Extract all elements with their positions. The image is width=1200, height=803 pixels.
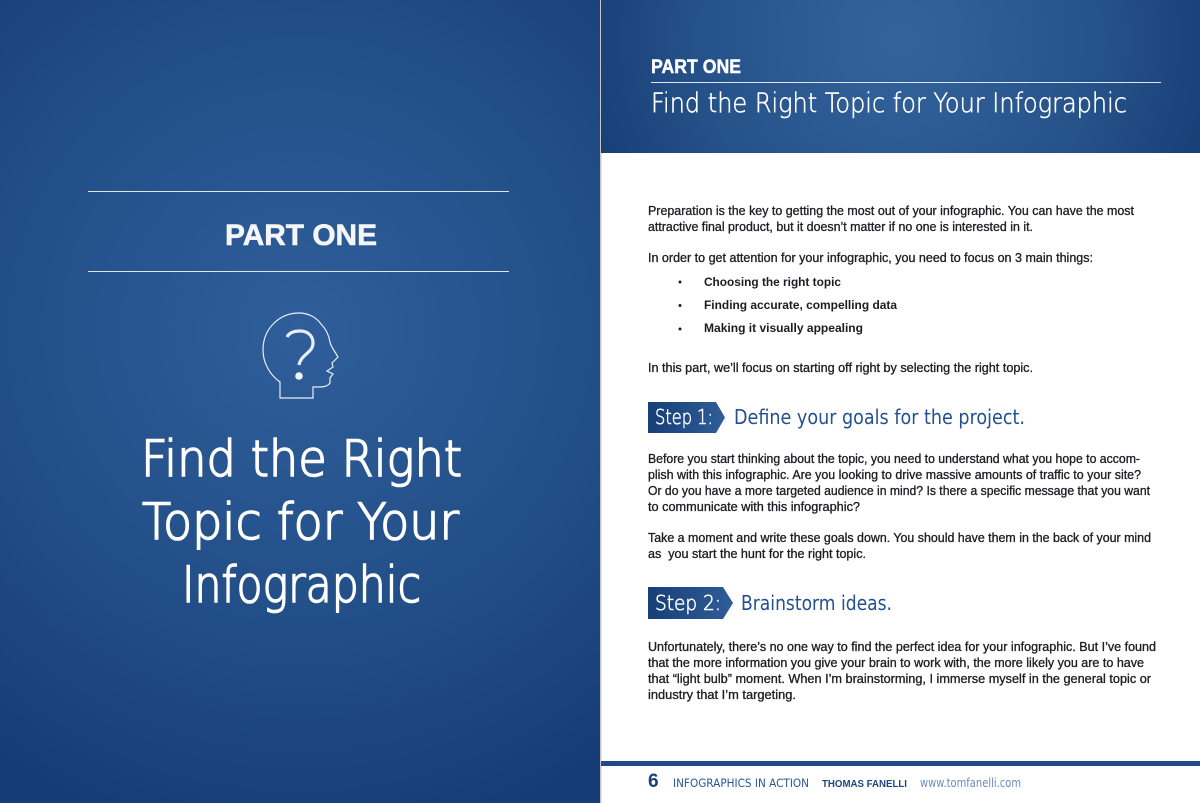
- header title: Find the Right Topic for Your Infographic: [651, 88, 1127, 119]
- icon: head with question mark: [263, 313, 338, 398]
- cover title: Topic for Your: [142, 493, 459, 551]
- website: www.tomfanelli.com: [920, 776, 1021, 790]
- cover title: Find the Right: [141, 430, 462, 488]
- book title: INFOGRAPHICS IN ACTION: [673, 776, 809, 790]
- panel: right page header: [601, 0, 1200, 153]
- text block: focus sentence: In this part, we’ll focus on starting off right by selecting the right topic.: [648, 360, 1033, 375]
- cover heading: part one: PART ONE: [225, 219, 377, 252]
- footer: [601, 761, 1200, 792]
- cover title: Infographic: [182, 556, 421, 614]
- bulleted list: Making it visually appealing: [704, 321, 863, 335]
- text block: step 2 body: that “light bulb” moment. When I’m brainstorming, I immerse myself in the general topic or: [648, 671, 1152, 686]
- text block: step 2 body: [648, 639, 1156, 702]
- text block: step 1 body: as you start the hunt for the right topic.: [648, 546, 866, 561]
- text block: introduction: attractive final product, but it doesn’t matter if no one is interested in it.: [648, 219, 1033, 234]
- page number: 6: [648, 771, 659, 792]
- text block: step 2 body: industry that I’m targeting.: [648, 687, 796, 702]
- text block: step 1 body: Before you start thinking about the topic, you need to understand what you hope to accom-: [648, 451, 1140, 466]
- step 1 heading: [648, 402, 1025, 433]
- step 1 arrow tag: [648, 402, 725, 433]
- panel: left cover page: [0, 0, 600, 803]
- text block: introduction: In order to get attention for your infographic, you need to focus on 3 main things:: [648, 250, 1093, 265]
- text block: step 2 body: that the more information you give your brain to work with, the more likely you are to have: [648, 655, 1144, 670]
- step 2 arrow tag: [648, 587, 733, 619]
- text block: step 1 body: Or do you have a more targeted audience in mind? Is there a specific message that you want: [648, 483, 1150, 498]
- header label: part one: PART ONE: [651, 57, 741, 78]
- step 2 arrow tag: Step 2:: [655, 591, 721, 615]
- step 1 arrow tag: Step 1:: [655, 405, 713, 429]
- text block: introduction: Preparation is the key to getting the most out of your infographic. You can have the most: [648, 203, 1134, 218]
- text block: step 2 body: Unfortunately, there’s no one way to find the perfect idea for your infographic. But I’ve found: [648, 639, 1156, 654]
- step 2 heading: Brainstorm ideas.: [741, 591, 892, 615]
- bulleted list: Finding accurate, compelling data: [704, 298, 897, 312]
- text block: step 1 body: plish with this infographic. Are you looking to drive massive amounts of traffic to your site?: [648, 467, 1141, 482]
- bulleted list: Choosing the right topic: [704, 275, 841, 289]
- text block: step 1 body: to communicate with this infographic?: [648, 499, 860, 514]
- author: THOMAS FANELLI: [822, 778, 907, 790]
- step 2 heading: [648, 587, 892, 619]
- cover title: [141, 430, 462, 614]
- step 1 heading: Define your goals for the project.: [734, 405, 1025, 429]
- bulleted list: [678, 275, 897, 335]
- text block: introduction: [648, 203, 1134, 265]
- page divider: [600, 0, 602, 803]
- text block: step 1 body: [648, 451, 1151, 561]
- text block: step 1 body: Take a moment and write these goals down. You should have them in the back of your mind: [648, 530, 1151, 545]
